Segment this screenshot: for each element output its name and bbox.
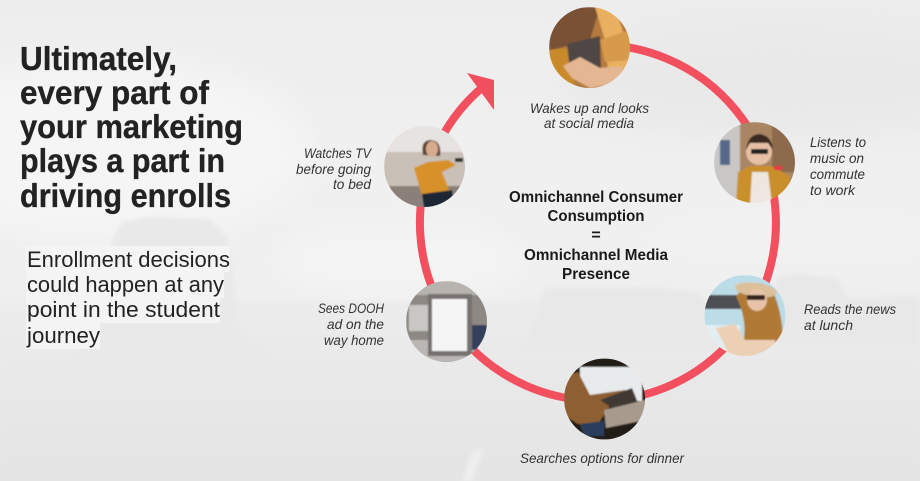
label: watches TV: to bed xyxy=(333,176,372,192)
label: listens to music: Listens to xyxy=(810,134,866,150)
center statement: Omnichannel Media xyxy=(524,247,668,264)
label: reads the news: Reads the news xyxy=(804,301,896,317)
label: listens to music: music on xyxy=(810,150,864,166)
label: reads the news xyxy=(804,301,896,333)
center statement xyxy=(509,189,683,283)
subtext: enrollment decisions: journey xyxy=(26,323,100,348)
label: listens to music: to work xyxy=(810,182,856,198)
title: plays a part in xyxy=(20,142,225,179)
label: listens to music: commute xyxy=(810,166,865,182)
photo: woman with headphones xyxy=(714,122,796,204)
label: watches TV: before going xyxy=(296,161,371,177)
label: wakes up: at social media xyxy=(544,115,634,131)
label: sees DOOH ad xyxy=(318,300,385,348)
label: sees DOOH ad: Sees DOOH xyxy=(318,300,385,316)
label: searches for dinner: Searches options for dinner xyxy=(520,450,685,466)
photo: hands on laptop xyxy=(564,358,646,440)
title xyxy=(20,40,243,214)
cycle arrow xyxy=(420,45,776,401)
title: driving enrolls xyxy=(20,177,231,214)
subtext: enrollment decisions: Enrollment decisions xyxy=(27,247,230,272)
center statement: Consumption xyxy=(548,208,644,225)
label: watches TV: Watches TV xyxy=(304,145,372,161)
label: sees DOOH ad: way home xyxy=(324,332,384,348)
label: listens to music xyxy=(810,134,866,198)
title: your marketing xyxy=(20,108,243,145)
subtext: enrollment decisions: could happen at any xyxy=(27,272,224,297)
photo: woman watching TV xyxy=(384,126,466,208)
subtext: enrollment decisions xyxy=(26,246,230,349)
title: Ultimately, xyxy=(20,40,177,77)
photo: woman with phone xyxy=(549,7,632,89)
center statement: Omnichannel Consumer xyxy=(509,189,683,206)
label: watches TV xyxy=(296,145,372,192)
center statement: Presence xyxy=(562,266,630,283)
label: wakes up xyxy=(530,100,649,131)
photo: woman at lunch xyxy=(704,275,786,357)
label: reads the news: at lunch xyxy=(804,317,853,333)
label: sees DOOH ad: ad on the xyxy=(327,316,384,332)
photo: DOOH billboard xyxy=(406,281,488,363)
title: every part of xyxy=(20,74,210,111)
center statement: = xyxy=(591,227,601,244)
label: wakes up: Wakes up and looks xyxy=(530,100,649,116)
subtext: enrollment decisions: point in the student xyxy=(27,297,220,322)
